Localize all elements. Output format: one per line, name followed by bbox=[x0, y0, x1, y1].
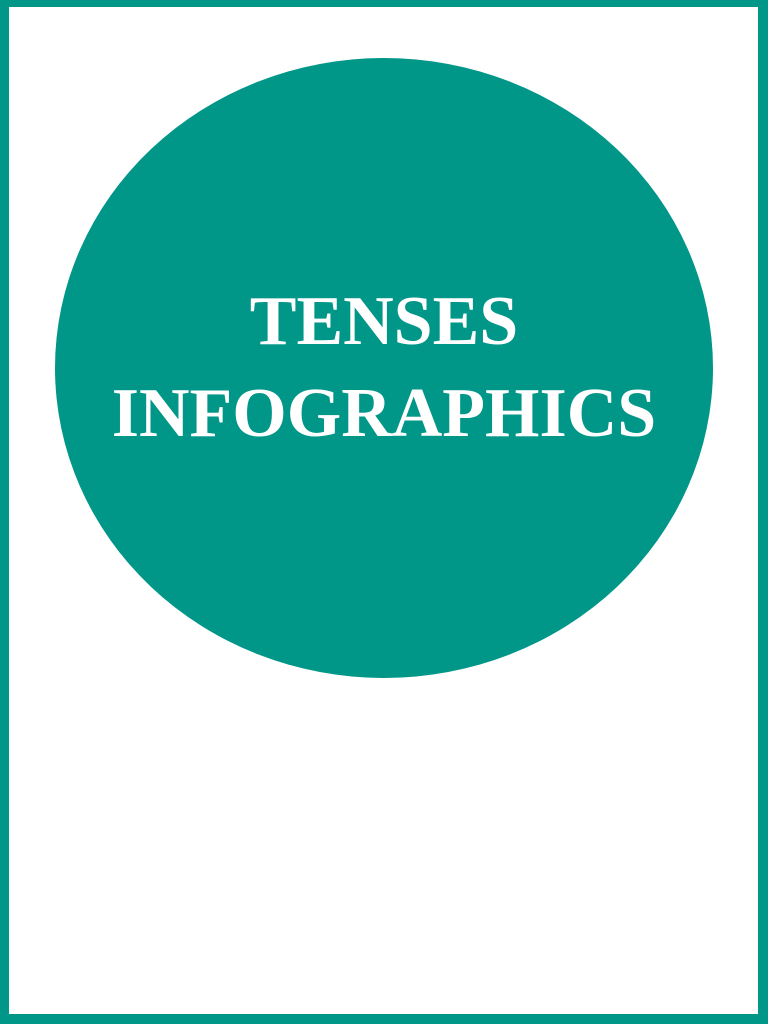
title: TENSES bbox=[250, 283, 518, 360]
title bbox=[112, 283, 656, 452]
teal circle bbox=[55, 58, 713, 678]
title: INFOGRAPHICS bbox=[112, 375, 656, 452]
